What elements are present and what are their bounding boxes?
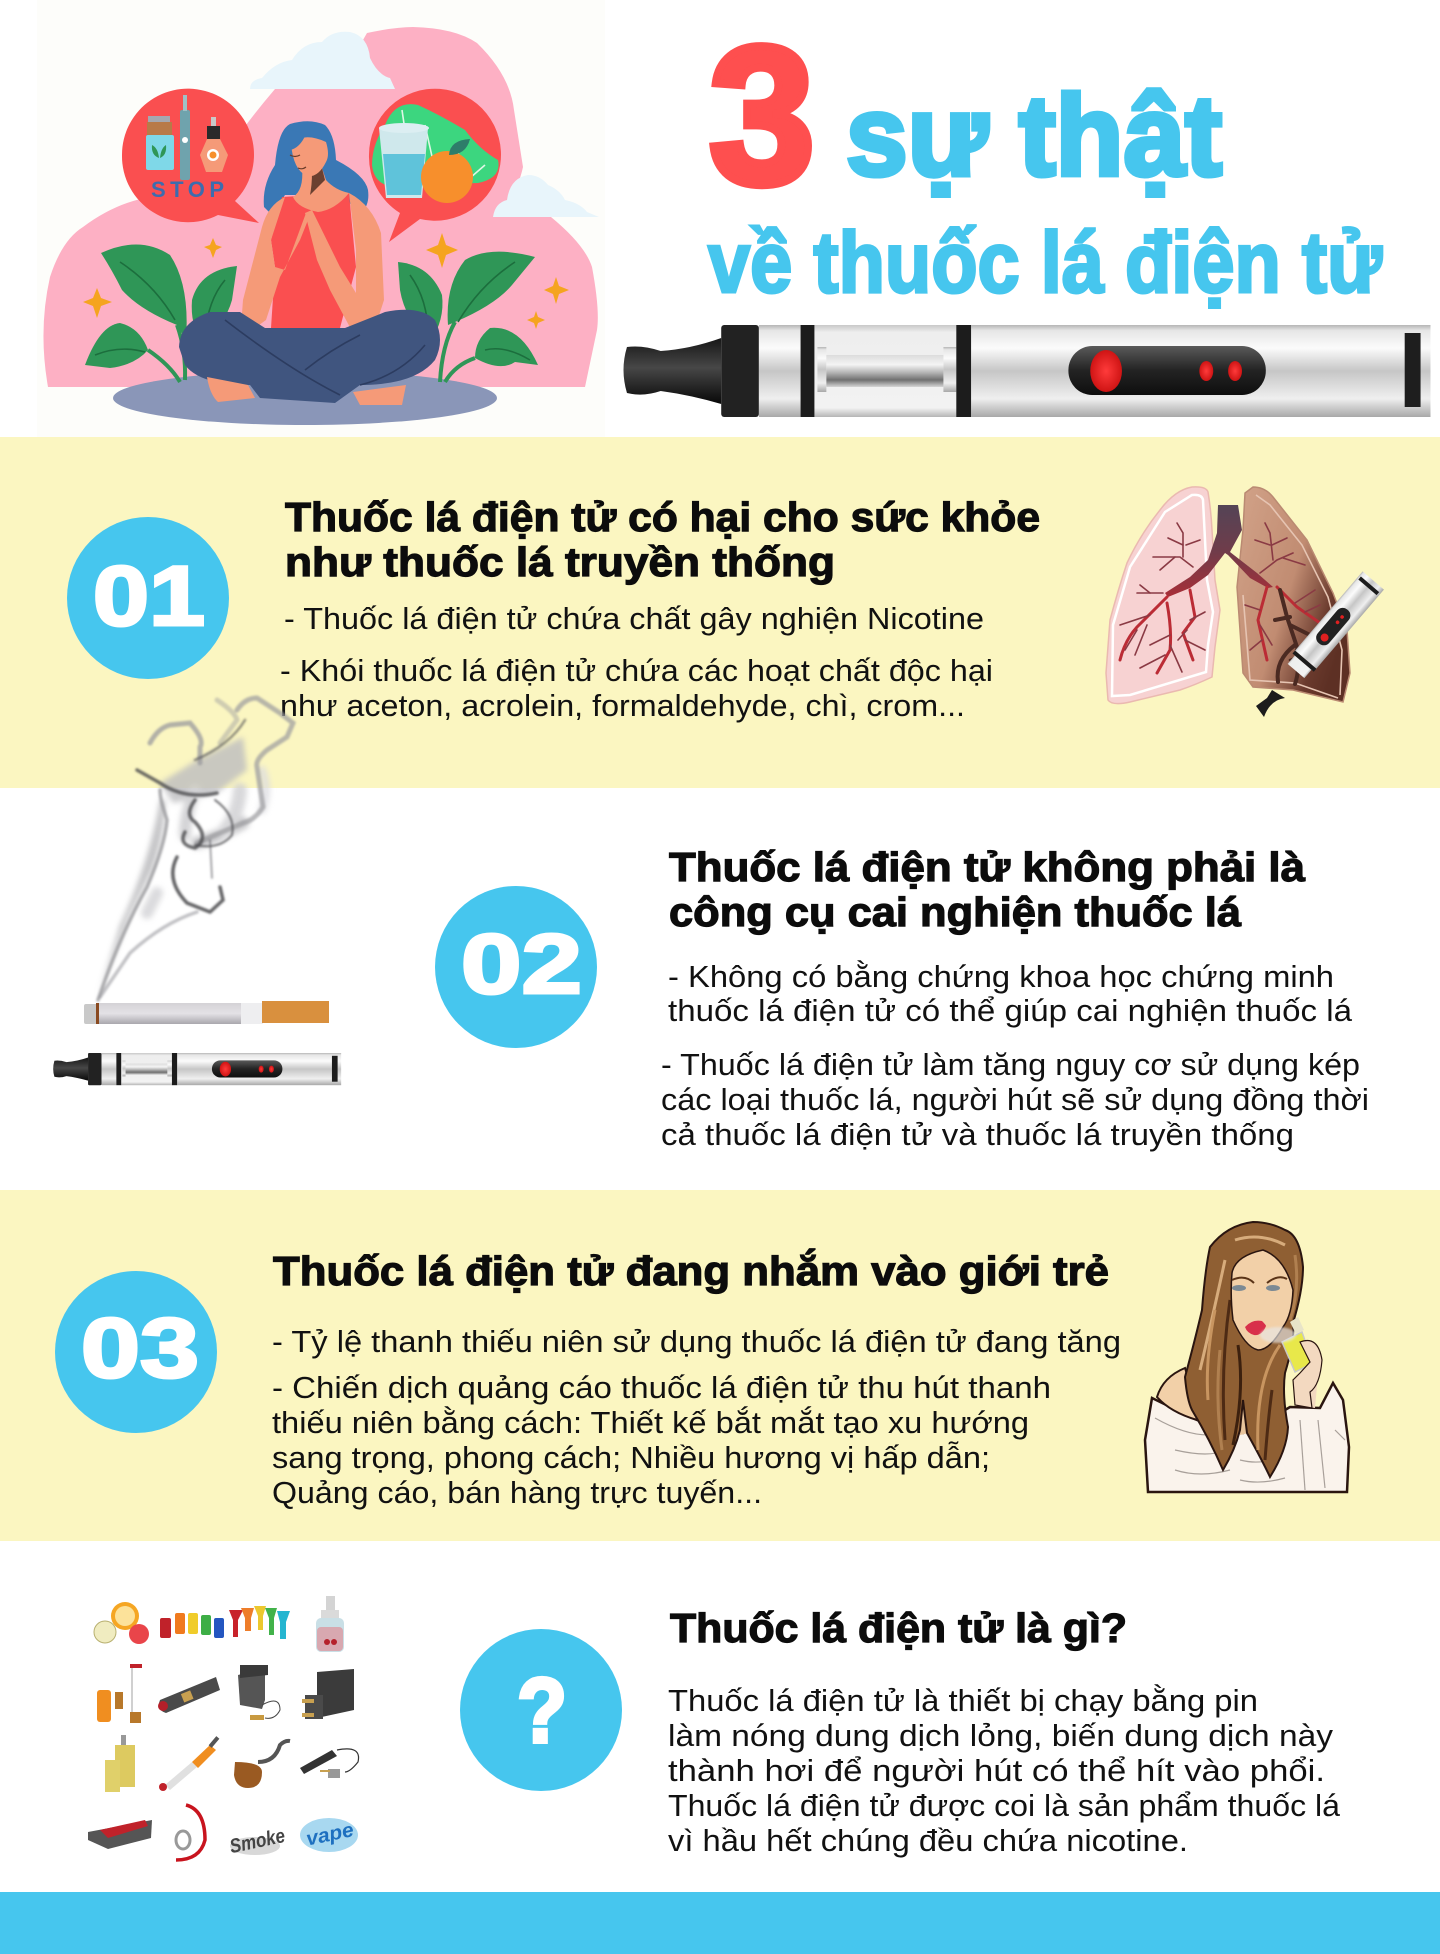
footer band	[0, 1892, 1440, 1954]
illustration: young woman vaping	[1145, 1222, 1349, 1492]
right arm	[305, 193, 384, 337]
woman	[179, 121, 440, 405]
panel: fact 1 background	[0, 437, 1440, 788]
fact 2 text: cả thuốc lá điện tử và thuốc lá truyền thống	[661, 1117, 1294, 1152]
icon: small e-cigarette	[53, 1053, 341, 1085]
hand and vape bottle	[1282, 1332, 1313, 1372]
fact 3 text: Quảng cáo, bán hàng trực tuyến...	[272, 1475, 762, 1510]
crossed legs	[179, 310, 440, 403]
fact 2 text	[661, 959, 1369, 1152]
row 3: pen	[159, 1736, 219, 1791]
what is it text: Thuốc lá điện tử là thiết bị chạy bằng pin	[668, 1683, 1258, 1718]
fact 1 heading: như thuốc lá truyền thống	[285, 539, 835, 585]
sparkle stars	[83, 233, 569, 329]
e-cigarette mouthpiece	[1256, 690, 1285, 717]
title number 3: 3	[709, 6, 815, 225]
fact 3 text	[272, 1324, 1121, 1510]
header background	[37, 0, 605, 437]
badge 01	[67, 517, 229, 679]
what is it heading: Thuốc lá điện tử là gì?	[670, 1605, 1127, 1651]
fact 2 text: - Không có bằng chứng khoa học chứng minh	[668, 959, 1334, 994]
fact 1 text: - Khói thuốc lá điện tử chứa các hoạt chất độc hại	[280, 653, 993, 688]
fact 2 text: thuốc lá điện tử có thể giúp cai nghiện thuốc lá	[668, 993, 1353, 1028]
fact 3 heading: Thuốc lá điện tử đang nhắm vào giới trẻ	[273, 1248, 1109, 1294]
fact 1 heading: Thuốc lá điện tử có hại cho sức khỏe	[285, 494, 1040, 540]
badge 02: 02	[461, 917, 582, 1011]
row 1: cherry liquid	[316, 1596, 344, 1652]
row 2: charger case	[238, 1665, 280, 1720]
pink background shape	[43, 27, 598, 387]
cloud right	[493, 175, 599, 217]
fact 1 text: như aceton, acrolein, formaldehyde, chì, crom...	[280, 688, 965, 723]
badge 03: 03	[81, 1301, 199, 1395]
fact 2 heading: công cụ cai nghiện thuốc lá	[669, 889, 1241, 935]
left lung	[1106, 487, 1220, 704]
hair	[264, 121, 368, 215]
fact 1 text: - Thuốc lá điện tử chứa chất gây nghiện Nicotine	[284, 601, 984, 636]
row 2: battery	[158, 1677, 220, 1713]
lips	[1245, 1321, 1266, 1335]
left arm	[241, 197, 312, 331]
title line 1: sự thật	[846, 73, 1222, 200]
illustration: meditating woman	[43, 27, 599, 425]
tar stains	[1275, 590, 1315, 684]
badge 03	[55, 1271, 217, 1433]
illustration: e-cigarette products	[88, 1596, 359, 1860]
shoulder	[1157, 1368, 1197, 1420]
title	[708, 6, 1383, 311]
row 1: fruit	[94, 1602, 149, 1644]
row 3: box mod	[105, 1735, 135, 1792]
row 1: drip tips	[229, 1606, 290, 1639]
speech bubble: stop vaping: STOP	[151, 177, 224, 202]
what is it text: làm nóng dung dịch lỏng, biến dung dịch này	[668, 1718, 1334, 1753]
what is it text	[668, 1683, 1341, 1858]
icon: large e-cigarette	[623, 325, 1430, 417]
icon: lungs with e-cigarette	[1106, 487, 1384, 717]
face	[1231, 1250, 1293, 1350]
row 1: e-liquid bottles	[160, 1613, 224, 1638]
row 4: lanyard	[176, 1805, 205, 1860]
fact 3 text: sang trọng, phong cách; Nhiều hương vị hấp dẫn;	[272, 1440, 990, 1475]
badge 02	[435, 886, 597, 1048]
right lung	[1237, 487, 1350, 702]
what is it text: thành hơi để người hút có thể hít vào phổi.	[668, 1753, 1325, 1788]
airway trachea	[1165, 505, 1273, 597]
fact 3 text: thiếu niên bằng cách: Thiết kế bắt mắt tạo xu hướng	[272, 1405, 1029, 1440]
fact 2 text: các loại thuốc lá, người hút sẽ sử dụng đồng thời	[661, 1082, 1369, 1117]
row 2: wall plug	[302, 1669, 354, 1719]
badge 01: 01	[93, 549, 205, 643]
leaf stems	[148, 322, 475, 382]
fact 3 text: - Tỷ lệ thanh thiếu niên sử dụng thuốc lá điện tử đang tăng	[272, 1324, 1121, 1359]
row 3: pipe	[234, 1741, 290, 1788]
fact 2 heading	[669, 844, 1305, 935]
row 2: kit parts	[97, 1664, 142, 1723]
badge question mark	[460, 1629, 622, 1791]
fact 2 text: - Thuốc lá điện tử làm tăng nguy cơ sử dụng kép	[661, 1047, 1360, 1082]
row 4: kit box	[88, 1820, 152, 1849]
icon: cigarette	[84, 1001, 329, 1024]
row 3: charging cable	[300, 1749, 359, 1778]
fact 1 heading	[285, 494, 1040, 585]
ground ellipse	[113, 371, 497, 425]
icon: cigarette smoke	[98, 698, 293, 1000]
what is it text: Thuốc lá điện tử được coi là sản phẩm thuốc lá	[668, 1788, 1341, 1823]
badge question mark: ?	[517, 1660, 567, 1762]
vapor	[1260, 1327, 1296, 1343]
speech bubble: stop vaping	[122, 89, 259, 223]
chest	[1235, 1400, 1262, 1435]
panel: fact 3 background	[0, 1190, 1440, 1541]
row 4: smoke sign: Smoke	[228, 1825, 287, 1858]
wrist	[1295, 1375, 1318, 1408]
long hair	[1185, 1222, 1303, 1477]
fact 1 text	[280, 601, 993, 723]
torso	[271, 193, 356, 328]
neck	[293, 168, 349, 212]
e-cigarette body	[1285, 571, 1384, 680]
lung branches	[1120, 587, 1320, 673]
sweater	[1145, 1383, 1349, 1492]
fact 3 text: - Chiến dịch quảng cáo thuốc lá điện tử thu hút thanh	[272, 1370, 1051, 1405]
row 4: vape sign: vape	[304, 1819, 356, 1851]
leaves	[85, 244, 538, 368]
eyes and brows	[1232, 1277, 1287, 1291]
what is it text: vì hầu hết chúng đều chứa nicotine.	[668, 1823, 1188, 1858]
fact 2 heading: Thuốc lá điện tử không phải là	[669, 844, 1305, 890]
speech bubble: healthy food	[369, 89, 501, 242]
cloud top	[250, 32, 395, 89]
face	[291, 137, 328, 176]
